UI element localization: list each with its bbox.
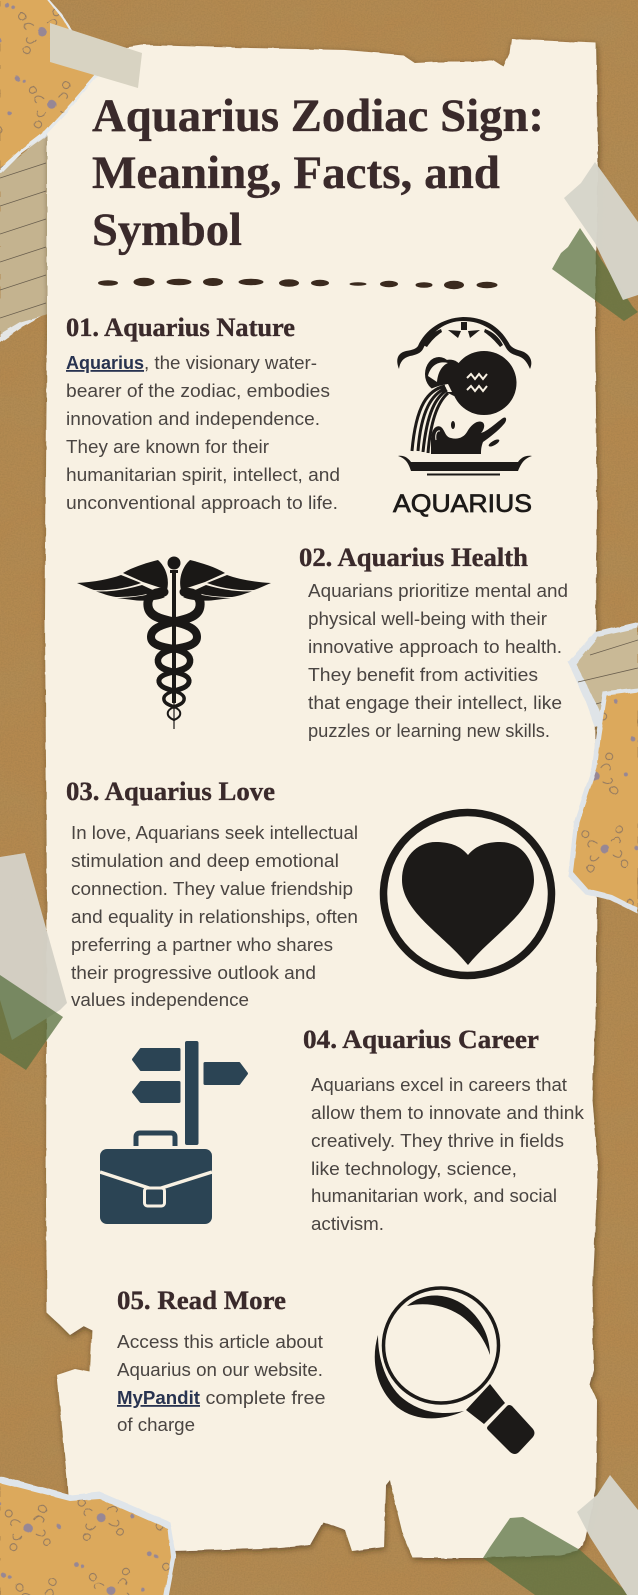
caduceus right wing [180, 560, 271, 601]
collage: beige and orange scraps right [568, 622, 638, 914]
icon: aquarius water bearer: AQUARIUS [393, 490, 532, 518]
tape: top left [50, 23, 142, 88]
icon: heart in ring [384, 812, 552, 976]
body text 02: puzzles or learning new skills. [308, 721, 550, 741]
body text 03: stimulation and deep emotional [71, 851, 339, 871]
caduceus left snake [148, 592, 197, 720]
title: Aquarius Zodiac Sign: [92, 90, 544, 142]
icon: caduceus [77, 556, 271, 729]
caduceus left wing [77, 560, 168, 601]
title: Meaning, Facts, and [92, 147, 500, 199]
body text 05: complete free [206, 1388, 326, 1408]
body text 02: Aquarians prioritize mental and [308, 581, 568, 601]
body text 02: innovative approach to health. [308, 637, 562, 657]
body text 02 [308, 581, 568, 741]
heading 01: 01. Aquarius Nature [66, 313, 295, 342]
body text 01 [66, 353, 340, 513]
body text 04 [311, 1075, 585, 1234]
icon: magnifying glass [375, 1288, 534, 1454]
body text 03: preferring a partner who shares [71, 935, 333, 955]
caduceus right snake [151, 592, 200, 720]
body text 03: connection. They value friendship [71, 879, 353, 899]
heading 02: 02. Aquarius Health [299, 543, 529, 572]
icon: aquarius water bearer [393, 317, 532, 518]
section 05: Read More [117, 1286, 534, 1454]
body text 05: Access this article about [117, 1332, 323, 1352]
collage: green strip bottom right [483, 1517, 630, 1595]
body text 02: physical well-being with their [308, 609, 547, 629]
collage: orange patterned scrap bottom left [0, 1476, 176, 1595]
body text 05: MyPandit [117, 1388, 200, 1408]
body text 04: allow them to innovate and think [311, 1103, 585, 1123]
body text 01: They are known for their [66, 437, 269, 457]
body text 03: In love, Aquarians seek intellectual [71, 823, 358, 843]
title: Symbol [92, 204, 242, 256]
section 01: Aquarius Nature [66, 313, 532, 518]
body text 02: They benefit from activities [308, 665, 538, 685]
body text 05: Aquarius on our website. [117, 1360, 323, 1380]
body text 03: and equality in relationships, often [71, 907, 358, 927]
body text 03 [71, 823, 358, 1010]
heading 04: 04. Aquarius Career [303, 1025, 539, 1054]
heading 03: 03. Aquarius Love [66, 777, 275, 806]
body text 01: Aquarius [66, 353, 144, 373]
body text 01: unconventional approach to life. [66, 493, 338, 513]
body text 04: creatively. They thrive in fields [311, 1131, 564, 1151]
body text 01: humanitarian spirit, intellect, and [66, 465, 340, 485]
icon: water bearer zodiac glyph on jar [467, 374, 487, 391]
body text 05: of charge [117, 1415, 195, 1435]
collage: lined beige scrap top left [0, 130, 48, 342]
body text 03: their progressive outlook and [71, 963, 316, 983]
title [92, 90, 544, 256]
section 03: Aquarius Love [66, 777, 552, 1010]
body text 05 [117, 1332, 326, 1435]
divider: brush dashes [98, 278, 498, 289]
caduceus staff and orb [168, 556, 180, 729]
body text 01: bearer of the zodiac, embodies [66, 381, 330, 401]
body text 02: that engage their intellect, like [308, 693, 562, 713]
body text 03: values independence [71, 990, 249, 1010]
section 02: Aquarius Health [77, 543, 568, 741]
collage: green strip left [0, 975, 63, 1070]
tape: bottom right [577, 1475, 638, 1595]
body text 01: innovation and independence. [66, 409, 320, 429]
tape: left middle [0, 853, 67, 1040]
body text 01: , the visionary water- [144, 353, 317, 373]
tape: top right [564, 162, 638, 300]
collage: green strip top right [552, 228, 638, 321]
heading 05: 05. Read More [117, 1286, 286, 1315]
section 04: Aquarius Career [100, 1025, 585, 1234]
collage: orange patterned scrap top left [0, 0, 99, 174]
body text 04: activism. [311, 1214, 384, 1234]
body text 04: Aquarians excel in careers that [311, 1075, 567, 1095]
body text 04: like technology, science, [311, 1159, 517, 1179]
icon: signpost and briefcase [100, 1041, 246, 1224]
body text 04: humanitarian work, and social [311, 1186, 557, 1206]
